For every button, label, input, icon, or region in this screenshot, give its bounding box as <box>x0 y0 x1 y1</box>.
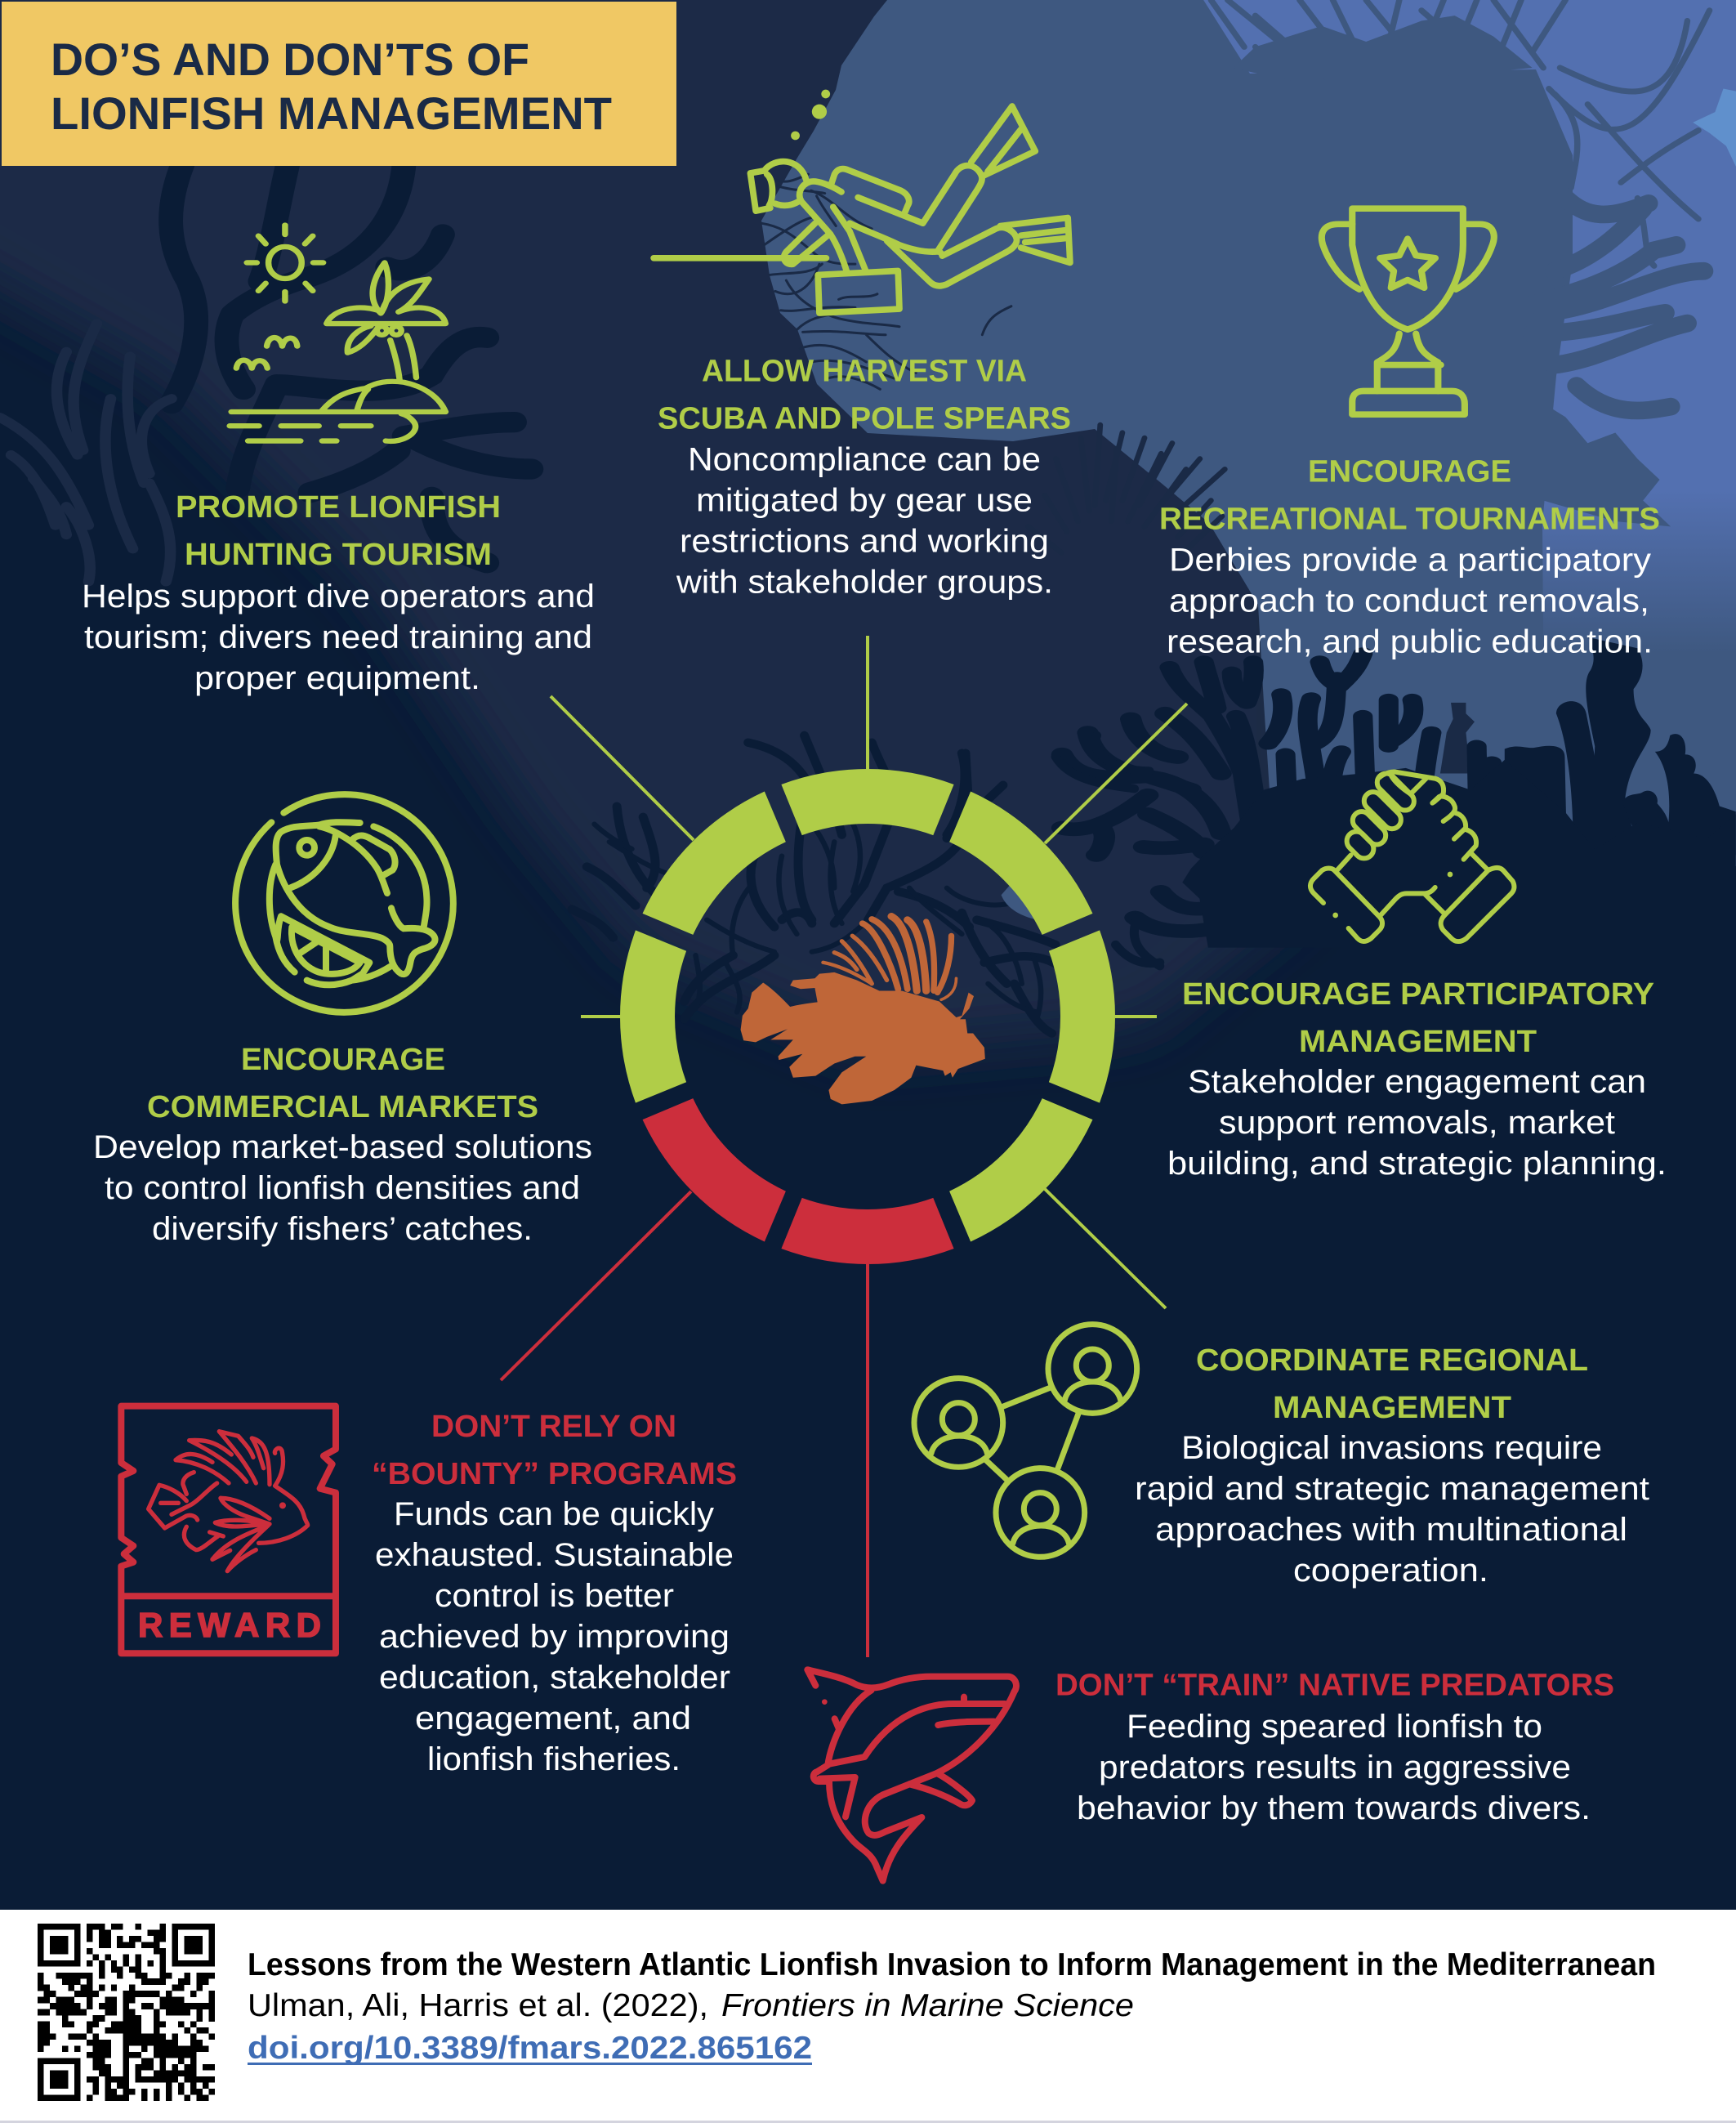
heading <box>147 1043 538 1124</box>
panel: encourage participatory management <box>1167 770 1667 1182</box>
DOI link text: doi.org/10.3389/fmars.2022.865162 <box>248 2031 812 2066</box>
body text: mitigated by gear use <box>696 482 1033 518</box>
body text: rapid and strategic management <box>1135 1471 1649 1507</box>
panel: encourage commercial markets <box>93 794 592 1247</box>
heading: DON’T RELY ON <box>431 1410 676 1444</box>
heading: ENCOURAGE <box>241 1043 445 1077</box>
heading <box>372 1410 737 1491</box>
body text: research, and public education. <box>1167 624 1653 660</box>
body text: Helps support dive operators and <box>82 579 595 615</box>
body text: achieved by improving <box>379 1619 730 1655</box>
body text: approaches with multinational <box>1155 1512 1627 1548</box>
body text: Funds can be quickly <box>394 1496 714 1532</box>
citation authors and journal: Frontiers in Marine Science <box>721 1988 1134 2023</box>
heading: PROMOTE LIONFISH <box>176 490 501 525</box>
heading: “BOUNTY” PROGRAMS <box>372 1457 737 1491</box>
icon: shark <box>807 1669 1016 1881</box>
body text: building, and strategic planning. <box>1167 1146 1667 1182</box>
panel: encourage recreational tournaments <box>1159 208 1660 660</box>
heading <box>1196 1343 1588 1425</box>
icon label: reward: REWARD <box>138 1606 321 1644</box>
body text: approach to conduct removals, <box>1169 583 1649 619</box>
body text <box>82 579 595 696</box>
body text <box>1077 1709 1591 1826</box>
heading <box>1159 454 1660 536</box>
icon: scuba diver with pole spear <box>654 90 1070 313</box>
heading <box>176 490 501 572</box>
panel: coordinate regional management <box>914 1325 1649 1589</box>
body text <box>1135 1430 1649 1589</box>
heading: ALLOW HARVEST VIA <box>702 355 1027 389</box>
footer panel <box>0 1910 1736 2123</box>
body text <box>676 441 1053 600</box>
body text: tourism; divers need training and <box>84 619 592 655</box>
body text: Stakeholder engagement can <box>1188 1064 1646 1100</box>
icon: fish on plate with lime <box>235 794 453 1012</box>
body text: Noncompliance can be <box>688 441 1041 477</box>
panel: allow harvest via scuba and pole spears <box>654 90 1071 601</box>
body text: cooperation. <box>1293 1553 1488 1589</box>
panel: promote lionfish hunting tourism <box>82 226 595 696</box>
heading: HUNTING TOURISM <box>185 538 492 572</box>
icon: trophy with star <box>1322 208 1494 414</box>
heading: SCUBA AND POLE SPEARS <box>658 402 1071 436</box>
body text <box>375 1496 734 1777</box>
body text <box>93 1129 592 1247</box>
body text <box>1167 543 1653 660</box>
heading: ENCOURAGE PARTICIPATORY <box>1182 977 1654 1012</box>
body text: exhausted. Sustainable <box>375 1537 734 1573</box>
heading <box>1182 977 1654 1059</box>
body text: behavior by them towards divers. <box>1077 1790 1591 1826</box>
heading: MANAGEMENT <box>1299 1025 1537 1059</box>
body text: restrictions and working <box>680 523 1049 559</box>
icon: clasped hands <box>1310 770 1514 941</box>
body text: lionfish fisheries. <box>427 1741 681 1777</box>
body text: education, stakeholder <box>379 1660 730 1696</box>
citation authors and journal: Ulman, Ali, Harris et al. (2022), <box>248 1988 708 2023</box>
central ring of eight segments <box>620 769 1115 1264</box>
body text: control is better <box>435 1578 674 1614</box>
title banner: DO’S AND DON’TS OF <box>51 34 529 85</box>
body text: support removals, market <box>1219 1105 1615 1141</box>
body text: engagement, and <box>415 1701 691 1736</box>
body text: to control lionfish densities and <box>105 1170 580 1206</box>
heading: RECREATIONAL TOURNAMENTS <box>1159 502 1660 536</box>
body text <box>1167 1064 1667 1182</box>
heading: DON’T “TRAIN” NATIVE PREDATORS <box>1055 1669 1614 1703</box>
title banner <box>2 2 676 166</box>
body text: Derbies provide a participatory <box>1169 543 1651 579</box>
heading: COMMERCIAL MARKETS <box>147 1090 538 1124</box>
icon: reward poster with lionfish <box>121 1406 336 1653</box>
QR code <box>38 1927 215 2098</box>
body text: proper equipment. <box>194 660 480 696</box>
heading <box>658 355 1071 436</box>
icon: sun, palm island and waves <box>230 226 445 441</box>
connector lines <box>501 636 1187 1657</box>
icon: lionfish silhouette <box>741 916 985 1104</box>
title banner: LIONFISH MANAGEMENT <box>51 87 612 139</box>
panel: don't rely on bounty programs <box>121 1406 737 1777</box>
heading: MANAGEMENT <box>1273 1391 1511 1425</box>
body text: predators results in aggressive <box>1099 1750 1571 1786</box>
icon: connected people network <box>914 1325 1137 1557</box>
heading: ENCOURAGE <box>1308 454 1511 489</box>
body text: Feeding speared lionfish to <box>1127 1709 1542 1745</box>
panel: don't train native predators <box>807 1669 1614 1881</box>
citation title: Lessons from the Western Atlantic Lionfish Invasion to Inform Management in the Mediterranean <box>248 1947 1656 1982</box>
body text: with stakeholder groups. <box>676 564 1053 600</box>
body text: Biological invasions require <box>1181 1430 1602 1466</box>
body text: diversify fishers’ catches. <box>152 1211 533 1247</box>
heading: COORDINATE REGIONAL <box>1196 1343 1588 1378</box>
body text: Develop market-based solutions <box>93 1129 592 1165</box>
citation authors and journal <box>248 1988 1134 2023</box>
